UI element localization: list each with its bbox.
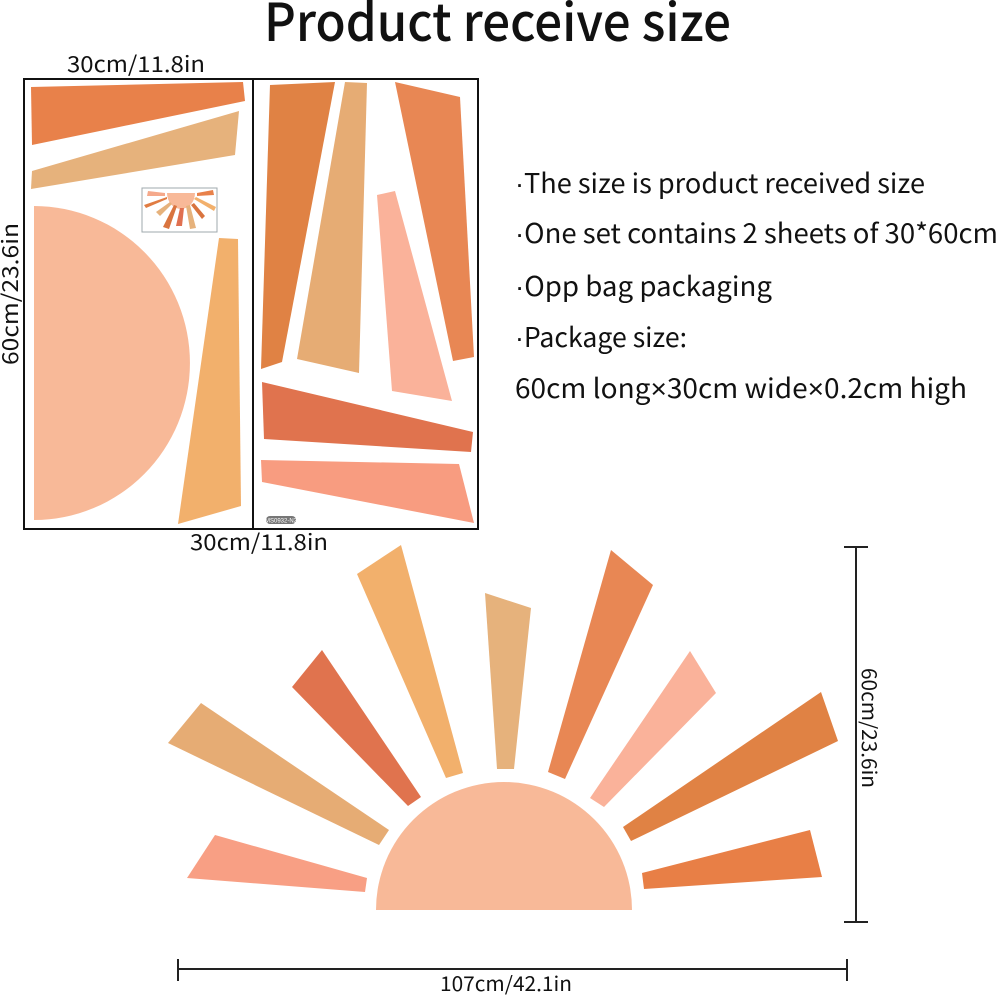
sheet code tag: MS0932-N2 [265,518,298,524]
mini sun thumbnail [142,188,217,232]
label: sheet width bottom: 30cm/11.8in [190,525,328,557]
assembled sun illustration [168,545,838,910]
text block: product details [515,162,998,406]
sheet 2 ray 2 [297,82,367,373]
text block: product details: ·Opp bag packaging [515,265,772,304]
panel: sheet 2 [253,79,478,529]
ray 7 [590,651,716,807]
dimension arrow: sun width [178,959,847,981]
ray 9 [642,830,822,889]
text block: product details: ·One set contains 2 sheets of 30*60cm [515,212,998,251]
ray 1 [187,835,367,892]
sheet 1 ray second [31,111,239,189]
label: sun width: 107cm/42.1in [440,968,572,997]
ray 8 [623,692,838,841]
sheet 1 ray right [178,238,241,524]
panel: sheet 1 [24,79,253,529]
ray 4 [357,545,463,778]
ray 2 [168,703,389,845]
ray 3 [292,650,421,806]
sheet 2 ray 1 [261,82,335,369]
sheet 2 ray 5 [262,382,473,452]
sheet code tag [265,516,298,524]
label: sheet width top: 30cm/11.8in [67,47,205,79]
ray 6 [548,550,653,779]
label: sun height: 60cm/23.6in [856,668,885,788]
dimension arrow: sun height [844,547,868,922]
text block: product details: 60cm long×30cm wide×0.2cm high [515,367,967,406]
half sun [376,782,632,910]
text block: product details: ·Package size: [515,316,687,355]
sheet 2 ray 3 [395,82,474,361]
sheet 1 half sun [34,206,190,520]
sheet 2 ray 4 [377,191,452,401]
ray 5 [485,593,531,769]
text block: product details: ·The size is product received size [515,162,925,201]
sheet 1 ray top [31,82,245,145]
sheet 2 ray 6 [261,460,474,523]
